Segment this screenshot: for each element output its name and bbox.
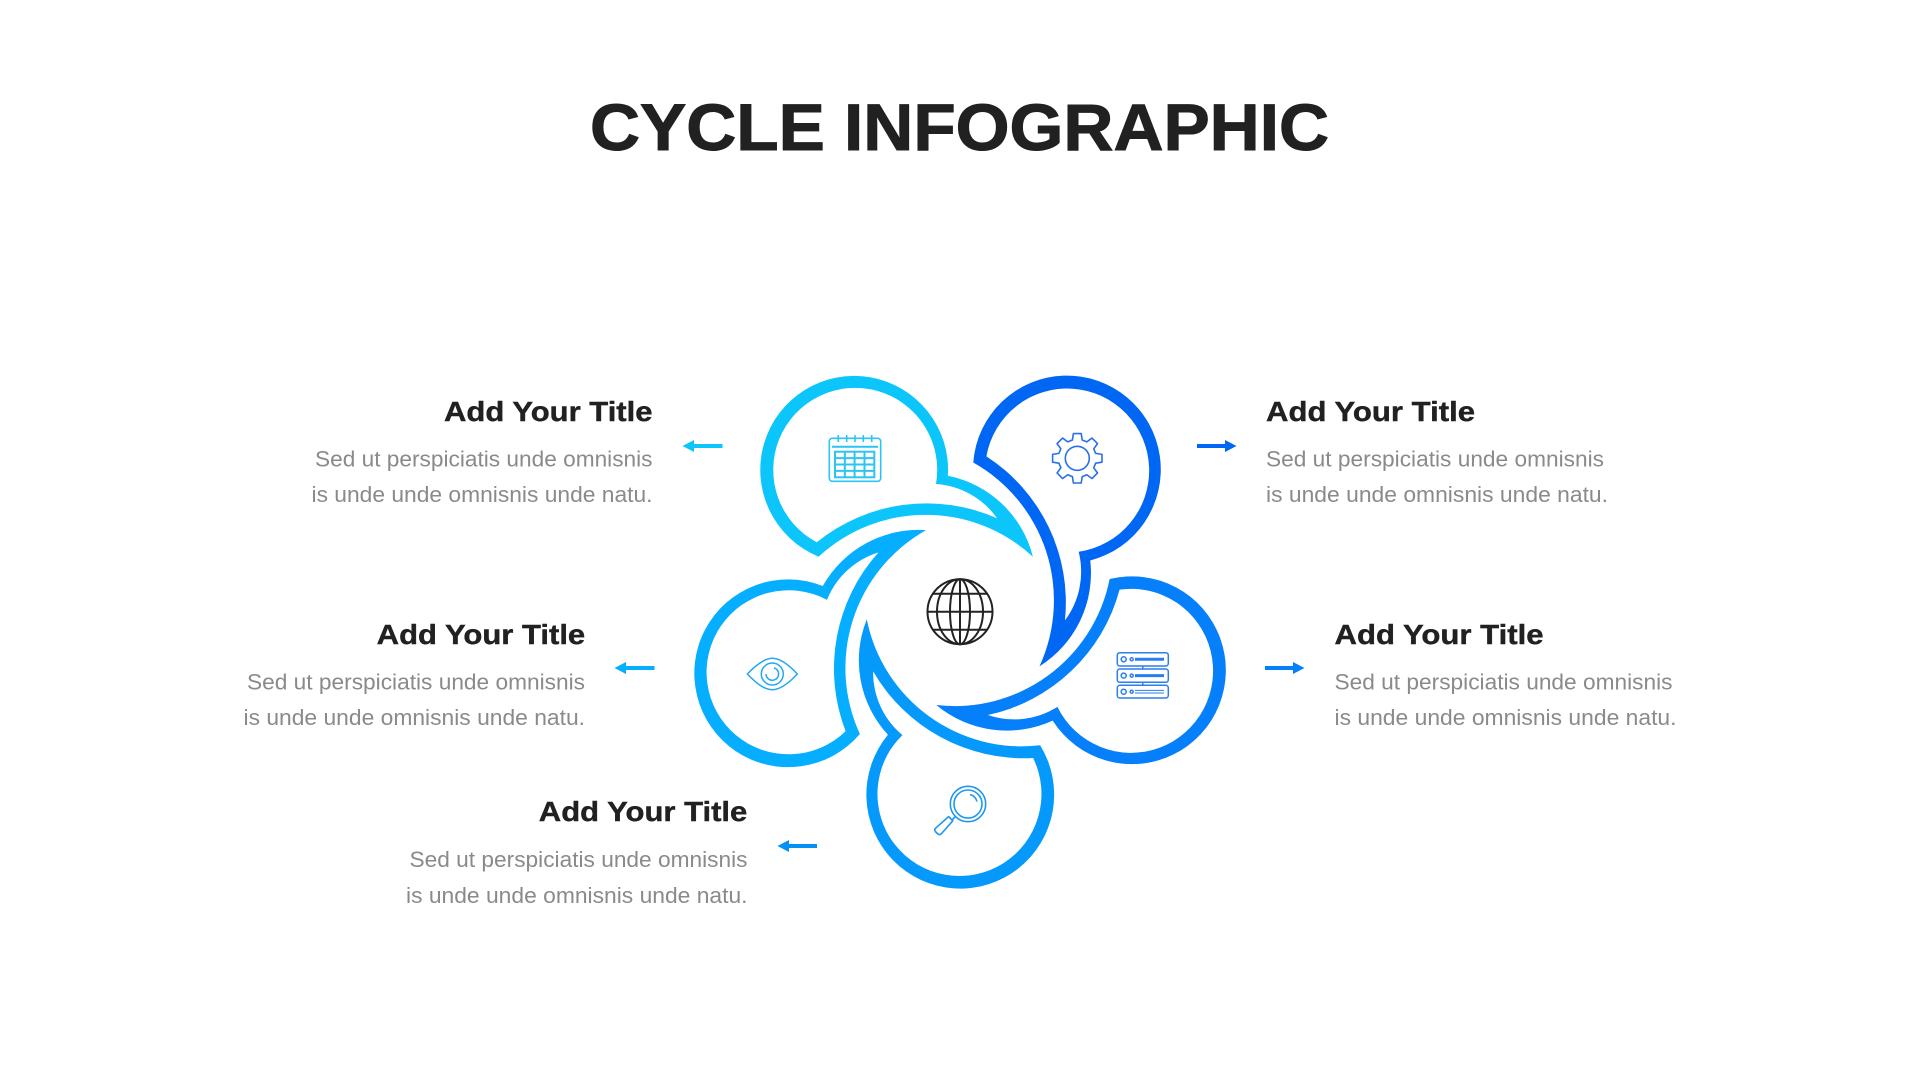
heading: Add Your Title: [1266, 396, 1475, 427]
body text: Sed ut perspiciatis unde omnisnis: [1334, 670, 1672, 694]
body text: is unde unde omnisnis unde natu.: [1266, 482, 1608, 507]
icon: eye: [747, 658, 797, 690]
heading: Add Your Title: [1334, 619, 1544, 650]
panel: top left text: [312, 396, 652, 507]
ring with tail: [955, 351, 1211, 666]
title: CYCLE INFOGRAPHIC: [590, 90, 1329, 164]
ring with tail: [670, 474, 926, 789]
ring with tail: [936, 545, 1263, 851]
heading: Add Your Title: [444, 396, 652, 427]
petal: server: [936, 545, 1263, 851]
panel: top right text: [1266, 396, 1608, 507]
arrow: top left: [682, 440, 722, 452]
petal: calendar: [760, 376, 1033, 557]
panel: middle right text: [1334, 619, 1676, 730]
arrow: middle right: [1265, 662, 1304, 674]
icon: gear: [1053, 434, 1102, 483]
ring with tail: [760, 376, 1033, 557]
petal: gear: [955, 351, 1211, 666]
panel: middle left text: [244, 619, 585, 730]
body text: is unde unde omnisnis unde natu.: [1334, 705, 1676, 730]
arrow: bottom left: [778, 840, 817, 852]
body text: Sed ut perspiciatis unde omnisnis: [1266, 446, 1604, 472]
body text: is unde unde omnisnis unde natu.: [406, 883, 748, 908]
heading: Add Your Title: [377, 619, 585, 650]
panel: bottom left text: [406, 796, 748, 908]
ring with tail: [760, 619, 1087, 926]
heading: Add Your Title: [539, 796, 747, 827]
petal: magnifier: [760, 619, 1087, 926]
icon: globe: [928, 579, 992, 644]
petal: eye: [670, 474, 926, 789]
icon: server: [1117, 653, 1168, 698]
body text: Sed ut perspiciatis unde omnisnis: [410, 847, 748, 872]
arrow: middle left: [614, 662, 654, 674]
arrow: top right: [1197, 440, 1236, 452]
body text: is unde unde omnisnis unde natu.: [312, 482, 652, 507]
body text: Sed ut perspiciatis unde omnisnis: [315, 446, 652, 472]
icon: magnifier: [935, 786, 986, 835]
body text: is unde unde omnisnis unde natu.: [244, 705, 585, 730]
icon: calendar: [829, 435, 881, 481]
body text: Sed ut perspiciatis unde omnisnis: [247, 670, 585, 694]
